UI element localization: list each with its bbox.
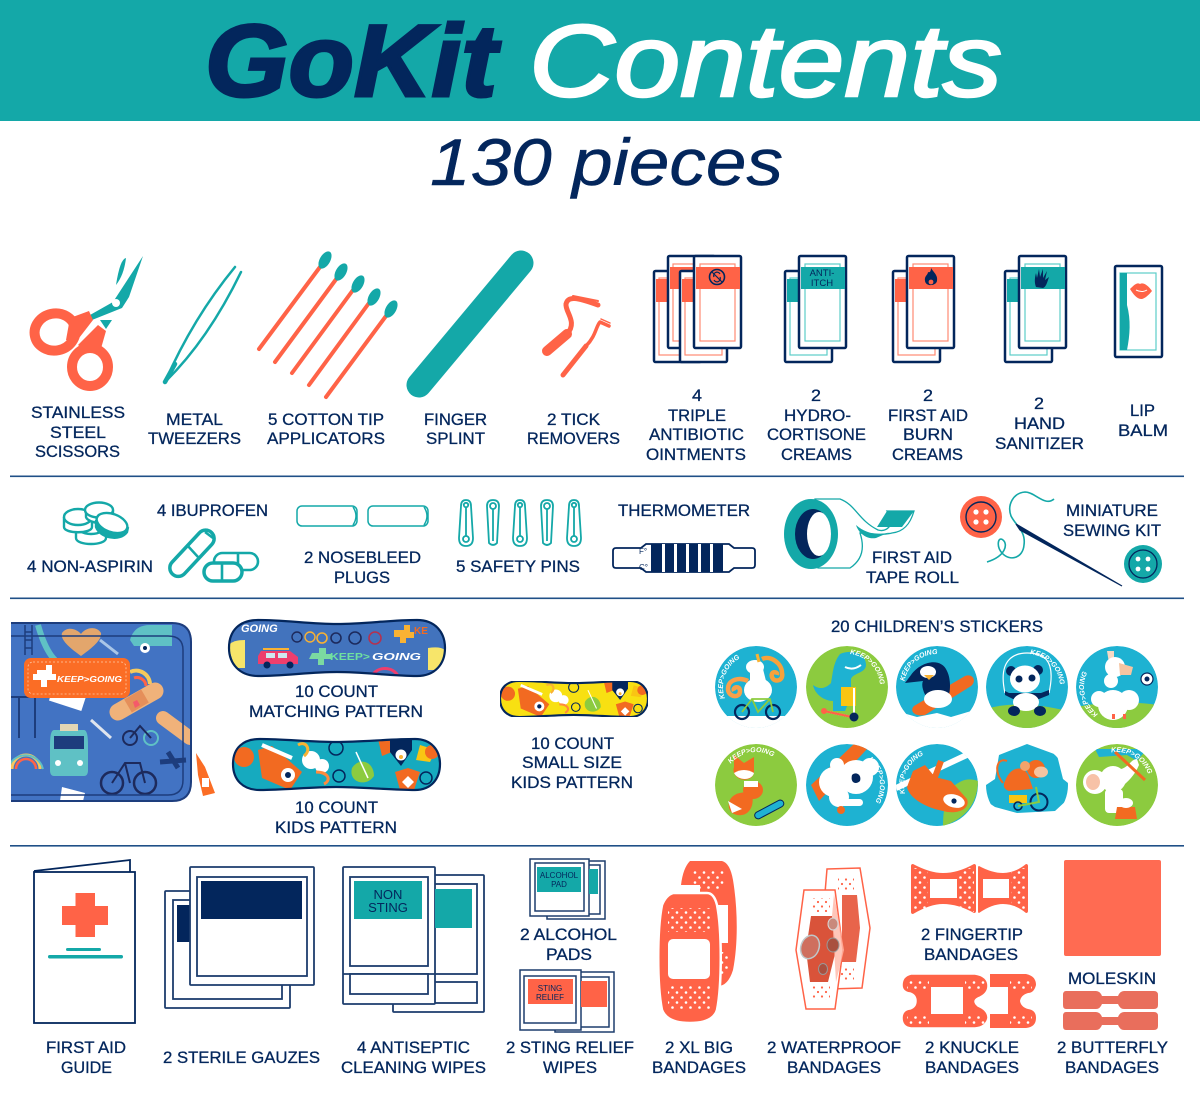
label: alcohol pads [520,925,617,964]
label: lip balm: LIP [1130,401,1155,420]
sticker: dinosaur on scooter: KEEP>GOING [850,649,885,684]
item: matching pattern bandages: GOING [372,652,421,663]
label: triple antibiotic ointments: TRIPLE [668,406,726,425]
label: lip balm [1118,401,1168,440]
label: hand sanitizer: HAND [1014,414,1065,433]
label: triple antibiotic ointments: 4 [692,386,702,405]
label: nosebleed plugs: PLUGS [334,568,390,587]
item: thermometer [613,544,755,572]
sticker: llama with ball [1076,646,1158,728]
label: fingertip bandages: BANDAGES [924,945,1018,964]
item: lip balm [1115,266,1162,357]
label: first aid tape roll: TAPE ROLL [866,568,959,587]
item: tick removers [547,296,610,375]
label: hydrocortisone creams: HYDRO- [784,406,851,425]
sticker: fox on skateboard: KEEP>GOING [728,747,774,764]
label: hydrocortisone creams [767,386,866,464]
label: hand sanitizer: 2 [1034,394,1044,413]
label: lip balm: BALM [1118,421,1168,440]
label: nosebleed plugs: 2 NOSEBLEED [304,548,421,567]
label: cotton tip applicators [267,410,385,448]
item: ibuprofen capsules [166,527,258,581]
label: sting relief wipes [506,1038,634,1077]
label: 10 count small size kids pattern: KIDS PATTERN [511,773,633,792]
sticker: penguin on snowboard: KEEP>GOING [900,649,938,682]
item: sting relief wipes: RELIEF [536,993,564,1002]
item: fingertip bandages [911,864,1028,914]
sticker: panda jumping rope: KEEP>GOING [1030,649,1065,684]
sticker: fox on skateboard [715,744,797,826]
item: first aid guide [34,860,135,1023]
label: sting relief wipes: WIPES [543,1058,597,1077]
sticker: sloth on branch [896,744,978,826]
label: xl big bandages [652,1038,746,1077]
item: metal tweezers [165,267,241,382]
label: metal tweezers: METAL [166,410,223,429]
label: first aid tape roll [866,548,959,587]
label: hydrocortisone creams: CORTISONE [767,425,866,444]
item: matching pattern bandages: KE [414,626,428,637]
sticker: llama with ball: KEEP>GOING [1079,672,1098,718]
label: knuckle bandages: BANDAGES [925,1058,1019,1077]
label: safety pins: 5 SAFETY PINS [456,557,580,576]
label: stainless steel scissors [31,403,125,461]
label: 10 count matching pattern: 10 COUNT [295,682,378,701]
item: sterile gauzes [165,867,314,1008]
sticker: koala on branch: KEEP>GOING [870,756,885,804]
sticker: unicorn on bike: KEEP>GOING [718,654,739,699]
item: scissors [31,256,143,386]
label: cotton tip applicators: APPLICATORS [267,429,385,448]
subtitle: 130 pieces: 130 pieces [430,125,783,199]
label: alcohol pads: 2 ALCOHOL [520,925,617,944]
header banner [0,0,1200,121]
item: antiseptic cleaning wipes [343,867,484,1012]
item: matching pattern bandages: KEEP> [330,652,370,663]
sticker: koala on branch [806,744,888,826]
label: first aid burn creams [888,386,968,464]
label: alcohol pads: PADS [546,945,592,964]
label: thermometer: THERMOMETER [618,501,750,520]
label: first aid guide: GUIDE [61,1058,112,1077]
label: tick removers: 2 TICK [547,410,601,429]
item: matching pattern bandages: GOING [241,623,278,635]
item: antiseptic cleaning wipes: NON [374,887,402,902]
item: cotton tip applicators [259,249,400,397]
label: first aid tape roll: FIRST AID [872,548,952,567]
title: GoKit Contents [205,4,1002,118]
item: hydrocortisone creams [785,256,846,362]
label: first aid burn creams: CREAMS [892,445,963,464]
label: moleskin: MOLESKIN [1068,969,1156,988]
label: antiseptic cleaning wipes [341,1038,486,1077]
label: 10 count small size kids pattern [511,734,633,792]
sticker: dinosaur on scooter [806,646,888,728]
sticker: panda jumping rope [986,646,1068,728]
label: butterfly bandages: BANDAGES [1065,1058,1159,1077]
item: kids pattern bandages [230,736,444,794]
label: waterproof bandages [767,1038,901,1077]
label: stainless steel scissors: STAINLESS [31,403,125,422]
item: hydrocortisone creams: ANTI- [810,268,834,279]
label: butterfly bandages: 2 BUTTERFLY [1057,1038,1168,1057]
label: triple antibiotic ointments [646,386,746,464]
label: sting relief wipes: 2 STING RELIEF [506,1038,634,1057]
item: xl big bandages [658,861,737,1023]
label: fingertip bandages [921,925,1023,964]
label: first aid guide [46,1038,126,1077]
label: sterile gauzes: 2 STERILE GAUZES [163,1048,320,1067]
label: xl big bandages: BANDAGES [652,1058,746,1077]
label: 4 ibuprofen: 4 IBUPROFEN [157,501,268,520]
label: hand sanitizer: SANITIZER [995,434,1084,453]
label: 10 count kids pattern [275,798,397,837]
item: matching pattern bandages [225,618,449,678]
label: cotton tip applicators: 5 COTTON TIP [268,410,384,429]
label: fingertip bandages: 2 FINGERTIP [921,925,1023,944]
title: GoKit Contents: GoKit [205,4,501,118]
item: non-aspirin tablets [64,502,130,544]
label: metal tweezers [148,410,241,448]
label: hand sanitizer [995,394,1084,453]
item: finger splint [419,263,521,385]
item: hand sanitizer [1005,256,1066,362]
label: 10 count small size kids pattern: SMALL SIZE [522,753,622,772]
sticker: elephant with toothbrush: KEEP>GOING [1111,747,1152,774]
item: patterned kit bag: KEEP>GOING [57,674,122,684]
sticker: sloth on branch: KEEP>GOING [899,751,923,794]
label: triple antibiotic ointments: OINTMENTS [646,445,746,464]
item: thermometer: F° [639,547,647,556]
item: small size kids bandages [500,681,648,717]
item: alcohol pads: PAD [551,880,567,889]
item: waterproof bandages [796,868,870,1009]
item: thermometer: C° [639,563,648,572]
sticker: unicorn on bike [715,646,797,728]
item: hydrocortisone creams: ITCH [811,278,833,289]
label: hydrocortisone creams: CREAMS [781,445,852,464]
item: moleskin [1064,860,1161,956]
label: 10 count kids pattern: KIDS PATTERN [275,818,397,837]
title: GoKit Contents: Contents [529,4,1002,118]
label: finger splint [424,410,487,448]
label: antiseptic cleaning wipes: 4 ANTISEPTIC [357,1038,470,1057]
item: butterfly bandages [1063,991,1158,1030]
item: antiseptic cleaning wipes: STING [368,900,408,915]
item: safety pins [459,500,581,546]
item: patterned kit bag [8,623,215,805]
label: 10 count small size kids pattern: 10 COUNT [531,734,614,753]
label: triple antibiotic ointments: ANTIBIOTIC [649,425,744,444]
label: stainless steel scissors: SCISSORS [35,442,120,461]
label: 10 count kids pattern: 10 COUNT [295,798,378,817]
label: knuckle bandages [925,1038,1019,1077]
item: sting relief wipes [520,970,614,1032]
label: 4 non-aspirin: 4 NON-ASPIRIN [27,557,153,576]
label: miniature sewing kit: SEWING KIT [1063,521,1161,540]
item: nosebleed plugs [297,506,428,526]
sticker: monkey on bike [986,744,1068,813]
label: nosebleed plugs [304,548,421,587]
label: miniature sewing kit [1063,501,1161,540]
label: tick removers [527,410,620,448]
item: alcohol pads: ALCOHOL [540,871,579,880]
item: tape roll [784,499,914,569]
item: first aid burn creams [893,256,954,362]
label: stainless steel scissors: STEEL [50,423,106,442]
item: sting relief wipes: STING [538,984,562,993]
label: first aid burn creams: FIRST AID [888,406,968,425]
label: waterproof bandages: 2 WATERPROOF [767,1038,901,1057]
label: finger splint: SPLINT [426,429,485,448]
label: antiseptic cleaning wipes: CLEANING WIPES [341,1058,486,1077]
label: tick removers: REMOVERS [527,429,620,448]
label: 20 children's stickers: 20 CHILDREN’S STICKERS [831,617,1043,636]
label: butterfly bandages [1057,1038,1168,1077]
item: knuckle bandages [902,974,1036,1028]
label: miniature sewing kit: MINIATURE [1066,501,1158,520]
label: waterproof bandages: BANDAGES [787,1058,881,1077]
label: knuckle bandages: 2 KNUCKLE [925,1038,1019,1057]
item: sewing kit [960,492,1162,586]
label: first aid guide: FIRST AID [46,1038,126,1057]
label: 10 count matching pattern: MATCHING PATTERN [249,702,423,721]
label: xl big bandages: 2 XL BIG [665,1038,733,1057]
label: first aid burn creams: BURN [903,425,953,444]
sticker: elephant with toothbrush [1076,744,1158,826]
item: alcohol pads [530,859,605,919]
label: 10 count matching pattern [249,682,423,721]
sticker: penguin on snowboard [896,646,978,728]
label: metal tweezers: TWEEZERS [148,429,241,448]
label: hydrocortisone creams: 2 [811,386,821,405]
item: triple antibiotic ointments [654,256,741,362]
label: first aid burn creams: 2 [923,386,933,405]
label: finger splint: FINGER [424,410,487,429]
